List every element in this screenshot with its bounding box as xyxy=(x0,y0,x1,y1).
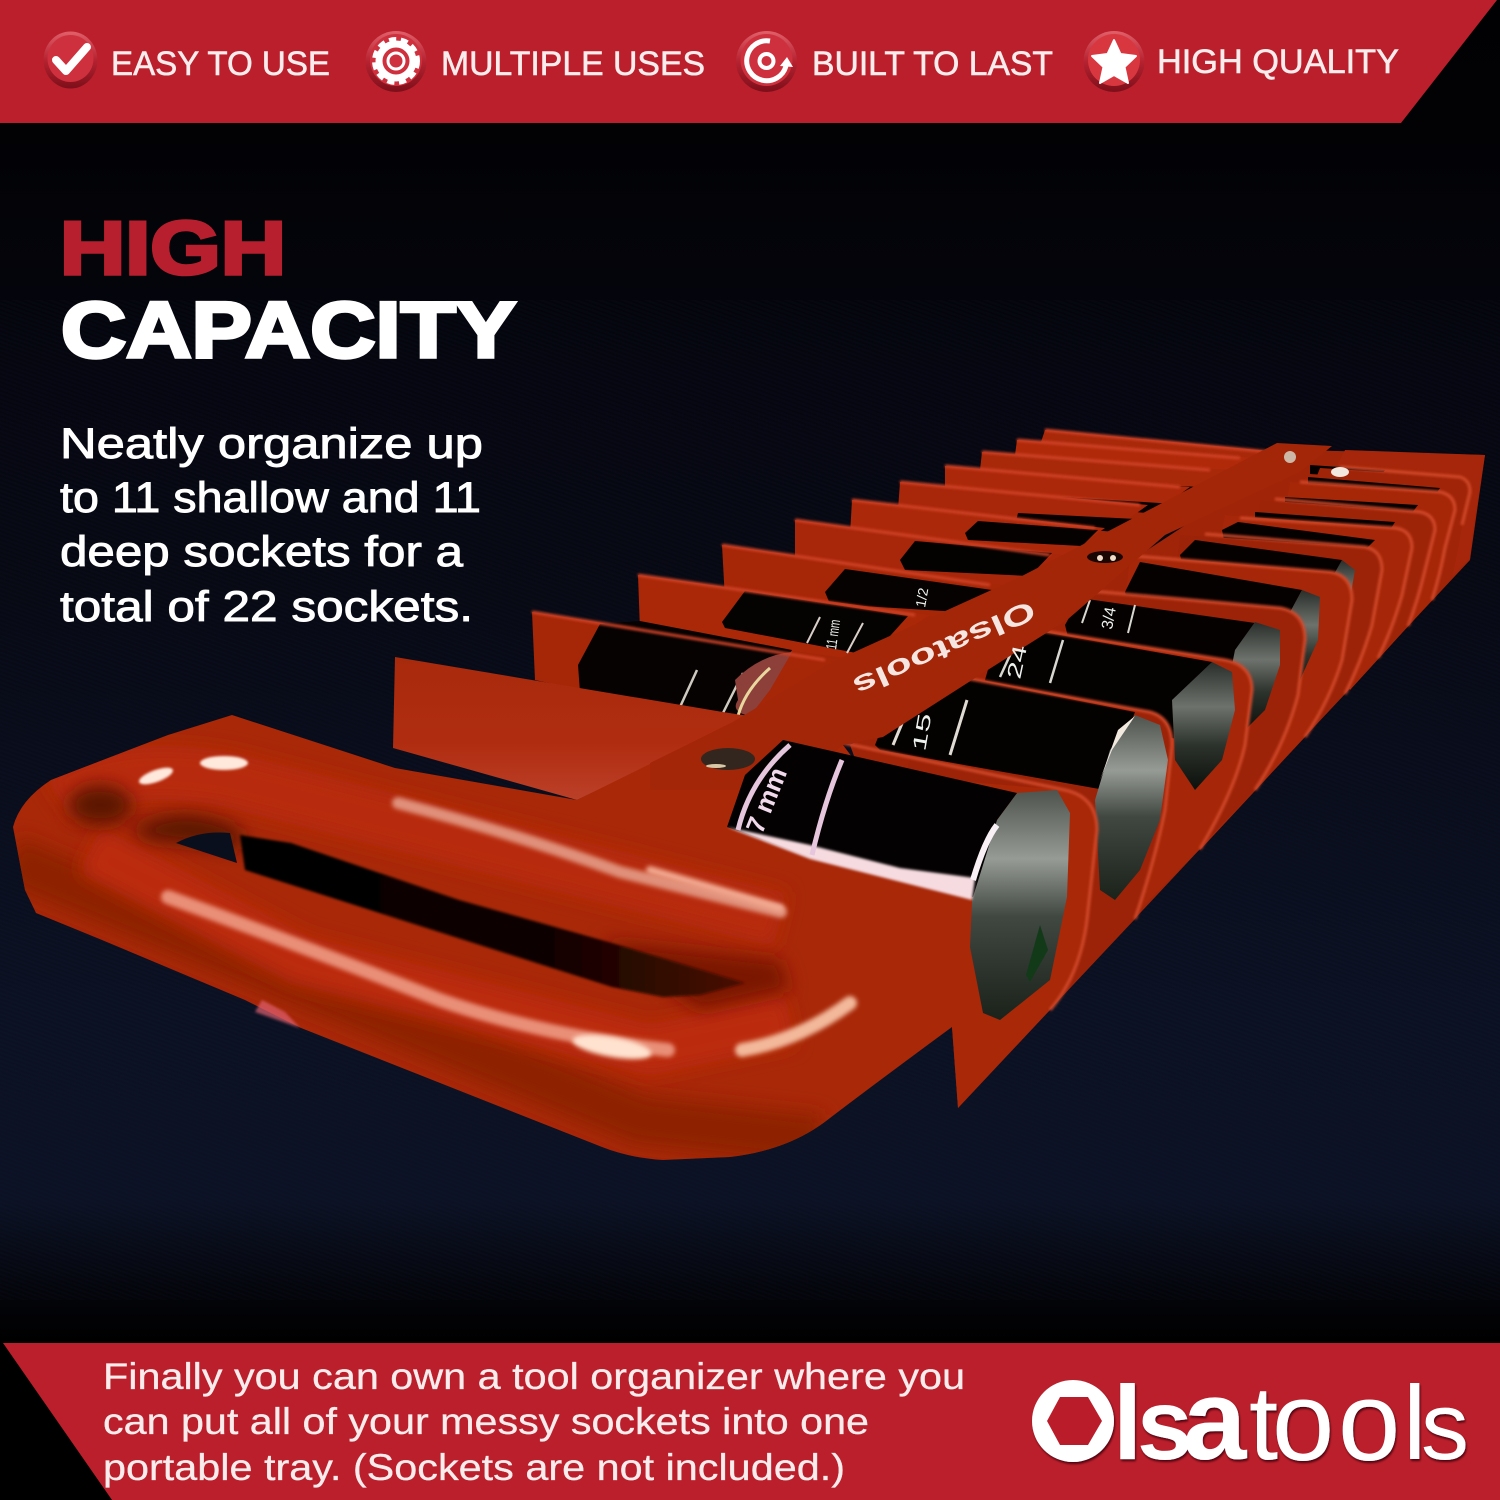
strip branding text: Olsatools xyxy=(849,595,1040,703)
heading: HIGH xyxy=(60,206,286,290)
bottom description text: portable tray. (Sockets are not included.) xyxy=(103,1447,845,1488)
label: multiple uses: MULTIPLE USES xyxy=(441,45,705,83)
label: easy to use: EASY TO USE xyxy=(111,45,330,83)
body text xyxy=(60,420,483,631)
body text: total of 22 sockets. xyxy=(60,583,473,631)
logo: Olsatools: a xyxy=(1183,1357,1248,1484)
logo: Olsatools: l xyxy=(1113,1365,1142,1482)
rear left ribs with shallow sockets xyxy=(532,430,1280,745)
bottom description text: can put all of your messy sockets into one xyxy=(103,1401,869,1442)
logo: Olsatools: l xyxy=(1403,1365,1426,1482)
front socket xyxy=(727,740,1070,1020)
socket size markings: 11 mm xyxy=(823,618,844,651)
label: built to last: BUILT TO LAST xyxy=(812,45,1053,83)
centre strip xyxy=(650,443,1332,790)
body text: Neatly organize up xyxy=(60,420,483,468)
icon: checkmark badge xyxy=(44,32,98,88)
label: high quality: HIGH QUALITY xyxy=(1157,43,1399,81)
product photo: red socket tray xyxy=(10,430,1485,1160)
logo: Olsatools xyxy=(1032,1357,1469,1484)
icon: cycle gear badge xyxy=(736,31,797,92)
bottom description text xyxy=(103,1356,965,1488)
heading xyxy=(60,206,516,374)
body text: deep sockets for a xyxy=(60,528,463,576)
logo: Olsatools: s xyxy=(1421,1373,1469,1480)
rivets xyxy=(701,451,1349,770)
logo: Olsatools: t xyxy=(1249,1365,1278,1482)
bottom banner xyxy=(3,1343,1500,1500)
bottom description text: Finally you can own a tool organizer where you xyxy=(103,1356,965,1397)
heading: CAPACITY xyxy=(61,285,516,374)
front socket: 7 mm xyxy=(740,763,793,837)
handle with carry slot xyxy=(10,715,960,1160)
icon: gear badge xyxy=(366,31,426,92)
body text: to 11 shallow and 11 xyxy=(60,474,481,522)
logo: Olsatools: s xyxy=(1137,1369,1193,1481)
logo: Olsatools: O xyxy=(1039,1373,1109,1473)
logo: Olsatools: o xyxy=(1338,1359,1400,1484)
socket size markings: 1/2 xyxy=(912,586,931,609)
socket size markings: 3/4 xyxy=(1099,606,1120,631)
right end ribs, sockets and hex holes xyxy=(700,450,1485,1108)
socket size markings xyxy=(823,586,1120,753)
socket size markings: 24 xyxy=(1003,643,1032,681)
left wing with speckled highlight xyxy=(393,657,782,800)
socket size markings: 15 xyxy=(909,712,937,753)
logo: Olsatools: o xyxy=(1272,1359,1334,1484)
icon: star badge xyxy=(1084,31,1144,92)
top banner xyxy=(0,0,1497,123)
